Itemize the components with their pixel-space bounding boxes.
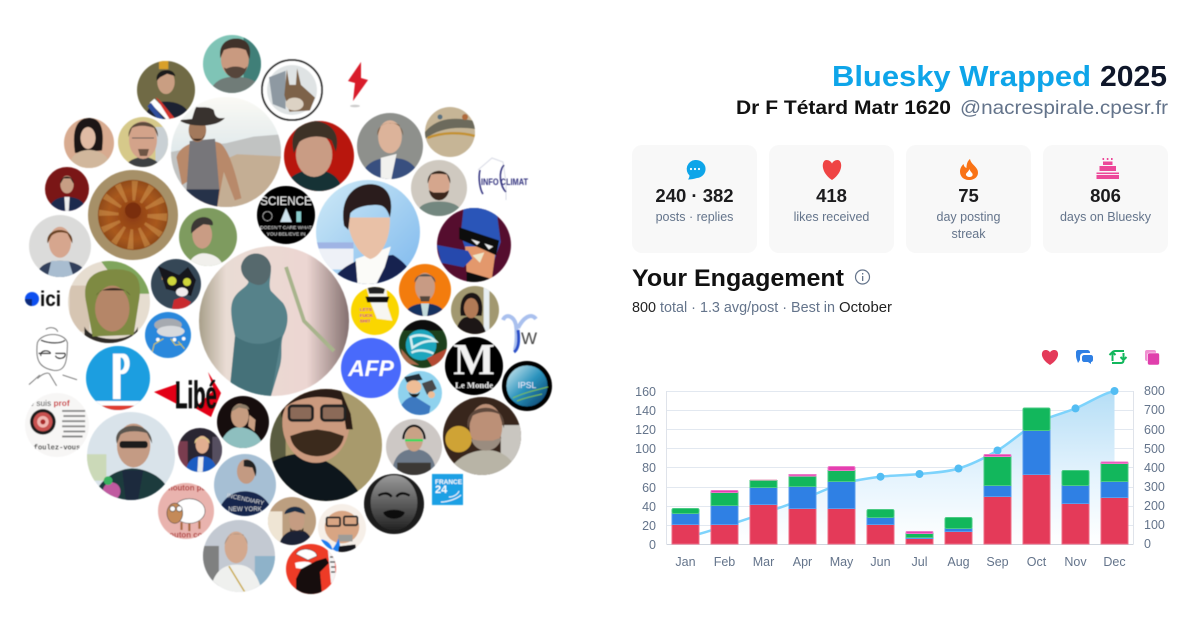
avatar: man with cap bbox=[268, 497, 316, 545]
avatar: Batman cartoon bbox=[437, 208, 511, 282]
avatar: woman with tricolour bbox=[178, 428, 222, 472]
avatar: cowboy in tank top bbox=[171, 97, 281, 207]
avatar: science poster: SCIENCE bbox=[260, 195, 312, 208]
avatar: memoji with butterfly bbox=[318, 504, 366, 552]
engagement summary: October bbox=[839, 300, 892, 316]
heading: Your Engagement: Your Engagement bbox=[632, 265, 844, 292]
right axis labels: 800 bbox=[1144, 384, 1165, 398]
logo: AFP: AFP bbox=[347, 356, 394, 381]
logo: GW bbox=[503, 316, 537, 352]
engagement summary: total · 1.3 avg/post · Best in bbox=[660, 300, 835, 316]
month labels: Aug bbox=[947, 555, 970, 569]
legend icons bbox=[1042, 350, 1160, 365]
icon: reposts legend bbox=[1110, 351, 1126, 363]
panel: posts and replies bbox=[632, 145, 757, 253]
avatar: mayor with sash bbox=[137, 61, 195, 119]
avatar: man with headset bbox=[386, 419, 442, 475]
avatar: woman on grey bbox=[29, 215, 91, 277]
logo: ici bbox=[25, 288, 61, 311]
left axis labels: 40 bbox=[642, 500, 656, 514]
avatar: man in red theatre bbox=[45, 167, 89, 211]
month labels: Dec bbox=[1103, 555, 1126, 569]
avatar: bearded man on teal bbox=[203, 35, 261, 93]
logo: GW: W bbox=[521, 329, 537, 348]
logo: Infoclimat bbox=[478, 158, 528, 200]
avatar: donkey with black ring bbox=[260, 58, 324, 122]
avatar: glass statue bbox=[199, 246, 349, 396]
logo: Libé bbox=[154, 372, 221, 417]
avatar: grey-bearded man bbox=[443, 397, 521, 475]
title: 2025 bbox=[1100, 61, 1167, 93]
grid lines bbox=[666, 391, 1134, 544]
subtitle: name and handle: Dr F Tétard Matr 1620 bbox=[736, 97, 951, 119]
avatar: woman with dark hair bbox=[64, 118, 114, 168]
subtitle: name and handle bbox=[736, 97, 1169, 119]
right axis labels: 700 bbox=[1144, 403, 1165, 417]
panel: likes received: 418 bbox=[816, 185, 847, 206]
avatar: cartoon cat bbox=[151, 259, 201, 309]
logo: Le Monde: Le Monde bbox=[455, 380, 493, 390]
logo: IPSL: IPSL bbox=[518, 380, 536, 390]
panel: days on Bluesky: days on Bluesky bbox=[1060, 210, 1152, 224]
engagement summary: 800 bbox=[632, 300, 656, 316]
avatar: masked bandit on yellow bbox=[351, 287, 399, 335]
icon: chat bubble bbox=[687, 160, 706, 180]
icon: quotes legend bbox=[1145, 350, 1160, 365]
avatar: science poster: DOESN'T CARE WHAT bbox=[260, 225, 312, 231]
avatar: science poster: YOU BELIEVE IN bbox=[267, 231, 306, 237]
avatar: man with glasses, large portrait bbox=[270, 382, 382, 501]
avatar: science poster bbox=[257, 186, 315, 244]
panel: day posting streak bbox=[906, 145, 1031, 253]
left axis labels: 80 bbox=[642, 461, 656, 475]
title: Bluesky Wrapped bbox=[832, 61, 1091, 93]
icon: info bbox=[856, 270, 870, 284]
month labels: Mar bbox=[753, 555, 774, 569]
stacked bars bbox=[672, 408, 1128, 544]
avatar: sheep badge: mouton cont bbox=[162, 530, 210, 539]
avatar: captain Haddock cartoon bbox=[398, 371, 442, 415]
logo: AFP bbox=[341, 338, 401, 398]
month labels: May bbox=[830, 555, 854, 569]
panel: day posting streak: day posting bbox=[937, 210, 1001, 224]
avatar: sheep badge bbox=[158, 483, 214, 539]
logo: Le Monde: M bbox=[453, 335, 495, 384]
avatar: je suis prof badge: foulez-vous bbox=[34, 444, 80, 452]
logo: red lightning bolt bbox=[348, 62, 368, 107]
logo: Libé: Libé bbox=[175, 375, 217, 417]
cumulative line bbox=[686, 391, 1114, 537]
icon: heart bbox=[823, 160, 841, 180]
avatar: curly man on red bbox=[284, 121, 354, 191]
avatar cloud bbox=[25, 35, 552, 594]
panel: posts and replies: posts · replies bbox=[656, 210, 733, 224]
left axis labels: 140 bbox=[635, 404, 656, 418]
month labels: Feb bbox=[714, 555, 735, 569]
avatar: man with green turban bbox=[68, 261, 150, 343]
panel: days on Bluesky bbox=[1043, 145, 1168, 253]
logo: ici: ici bbox=[40, 288, 61, 311]
engagement summary bbox=[632, 300, 892, 316]
avatar: masked bandit on yellow: LETS bbox=[360, 307, 373, 313]
icon: flame bbox=[960, 159, 978, 180]
right axis labels: 500 bbox=[1144, 442, 1165, 456]
avatar: bearded man in shirt bbox=[411, 160, 467, 216]
panel: likes received: likes received bbox=[794, 210, 869, 224]
avatar: man in navy suit on TV set bbox=[316, 180, 420, 284]
right axis labels: 300 bbox=[1144, 480, 1165, 494]
avatar: man in suit on grey bbox=[357, 113, 423, 179]
icon: replies legend bbox=[1076, 350, 1093, 364]
avatar: masked bandit on yellow: SHIT bbox=[360, 319, 371, 325]
icon: birthday cake bbox=[1096, 158, 1119, 179]
left axis labels: 20 bbox=[642, 519, 656, 533]
avatar: je suis prof badge: je suis prof bbox=[27, 398, 70, 408]
month labels: Nov bbox=[1064, 555, 1087, 569]
month labels: Jun bbox=[870, 555, 891, 569]
left axis labels bbox=[635, 385, 656, 552]
chart: monthly engagement bbox=[635, 384, 1165, 569]
panel: days on Bluesky: 806 bbox=[1090, 185, 1121, 206]
right axis labels: 200 bbox=[1144, 499, 1165, 513]
left axis labels: 100 bbox=[635, 442, 656, 456]
month labels: Sep bbox=[986, 555, 1009, 569]
line points bbox=[876, 387, 1118, 481]
left axis labels: 60 bbox=[642, 481, 656, 495]
avatar: medieval map bbox=[425, 107, 475, 157]
panel: posts and replies: 240 · 382 bbox=[655, 185, 734, 206]
avatar: man in white t-shirt bbox=[179, 208, 237, 266]
logo: P on blue bbox=[86, 346, 150, 411]
right axis labels: 400 bbox=[1144, 461, 1165, 475]
avatar: man in black glasses bbox=[87, 412, 175, 500]
right axis labels bbox=[1144, 384, 1165, 551]
month labels bbox=[675, 555, 1126, 569]
logo: France 24 bbox=[432, 474, 463, 505]
avatar: line-art woman bbox=[29, 328, 77, 386]
avatar: man in New York hoodie bbox=[214, 454, 276, 516]
right axis labels: 100 bbox=[1144, 518, 1165, 532]
avatar: je suis prof badge bbox=[25, 393, 89, 457]
left axis labels: 160 bbox=[635, 385, 656, 399]
month labels: Apr bbox=[793, 555, 812, 569]
avatar: sheep badge: mouton pu bbox=[166, 483, 206, 492]
avatar: man with glasses bbox=[118, 117, 168, 167]
avatar: red cartoon man bbox=[286, 544, 336, 594]
panel: day posting streak: 75 bbox=[958, 185, 979, 206]
logo: France 24: 24 bbox=[435, 484, 448, 496]
avatar: masked bandit on yellow: FUCK bbox=[360, 313, 373, 319]
avatar: man on phone bbox=[217, 396, 269, 448]
avatar: caramel dome bbox=[88, 170, 178, 260]
avatar: man on orange bbox=[399, 264, 451, 316]
logo: France 24: FRANCE bbox=[435, 479, 463, 486]
icon: likes legend bbox=[1042, 350, 1058, 365]
right axis labels: 600 bbox=[1144, 423, 1165, 437]
panel: likes received bbox=[769, 145, 894, 253]
avatar: black and white portrait bbox=[364, 474, 424, 534]
panel: day posting streak: streak bbox=[951, 227, 986, 241]
logo: Le Monde bbox=[445, 335, 503, 395]
right axis labels: 0 bbox=[1144, 537, 1151, 551]
month labels: Jul bbox=[912, 555, 927, 569]
left axis labels: 120 bbox=[635, 423, 656, 437]
month labels: Jan bbox=[675, 555, 696, 569]
left axis labels: 0 bbox=[649, 538, 656, 552]
logo: IPSL bbox=[502, 361, 552, 411]
avatar: storm cloud bbox=[145, 312, 191, 358]
avatar: hands holding earth bbox=[399, 320, 447, 368]
avatar: man in New York hoodie: NEW YORK bbox=[228, 506, 263, 513]
logo: Infoclimat: INFO CLIMAT bbox=[481, 177, 528, 187]
avatar: man in New York hoodie: INCENDIARY bbox=[226, 492, 265, 507]
month labels: Oct bbox=[1027, 555, 1047, 569]
cumulative area bbox=[686, 391, 1114, 544]
subtitle: name and handle: @nacrespirale.cpesr.fr bbox=[960, 97, 1169, 119]
avatar: man in white coat bbox=[203, 520, 275, 592]
avatar: smiling woman bbox=[451, 286, 499, 334]
